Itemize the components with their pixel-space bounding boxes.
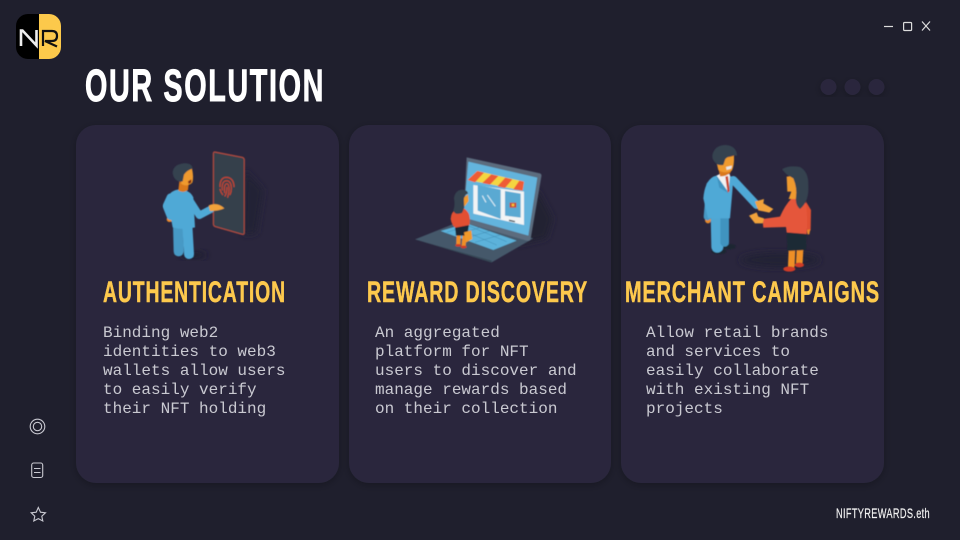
logo: NR (16, 14, 61, 59)
icon: handshake between man and woman (703, 145, 820, 272)
title: OUR SOLUTION (85, 60, 325, 111)
text: authentication description: identities to web3 (103, 343, 276, 361)
text: reward discovery description: manage rewards based (375, 381, 567, 399)
text: reward discovery description: An aggregated (375, 324, 500, 342)
heading: authentication: AUTHENTICATION (103, 276, 286, 309)
text: reward discovery description: on their collection (375, 400, 557, 418)
text: authentication description: wallets allow users (103, 362, 285, 380)
pagination dots (820, 79, 884, 95)
window controls (884, 22, 930, 30)
text: merchant campaigns description: and services to (646, 343, 790, 361)
text: merchant campaigns description: projects (646, 400, 723, 418)
panel: reward discovery (349, 125, 611, 483)
text: reward discovery description: platform for NFT (375, 343, 529, 361)
icon: laptop storefront (415, 157, 553, 263)
panel: authentication (76, 125, 339, 483)
text: merchant campaigns description: with existing NFT (646, 381, 809, 399)
text: authentication description: to easily verify (103, 381, 257, 399)
text: authentication description: Binding web2 (103, 324, 218, 342)
text: merchant campaigns description: Allow retail brands (646, 324, 828, 342)
text: reward discovery description: users to discover and (375, 362, 577, 380)
text: authentication description: their NFT holding (103, 400, 266, 418)
heading: reward discovery: REWARD DISCOVERY (367, 276, 588, 309)
panel: merchant campaigns (621, 125, 884, 483)
icon: document (32, 463, 43, 478)
icon: man with fingerprint phone (167, 152, 263, 258)
icon: target (30, 419, 45, 434)
icon: star (31, 508, 46, 521)
text: merchant campaigns description: easily collaborate (646, 362, 819, 380)
